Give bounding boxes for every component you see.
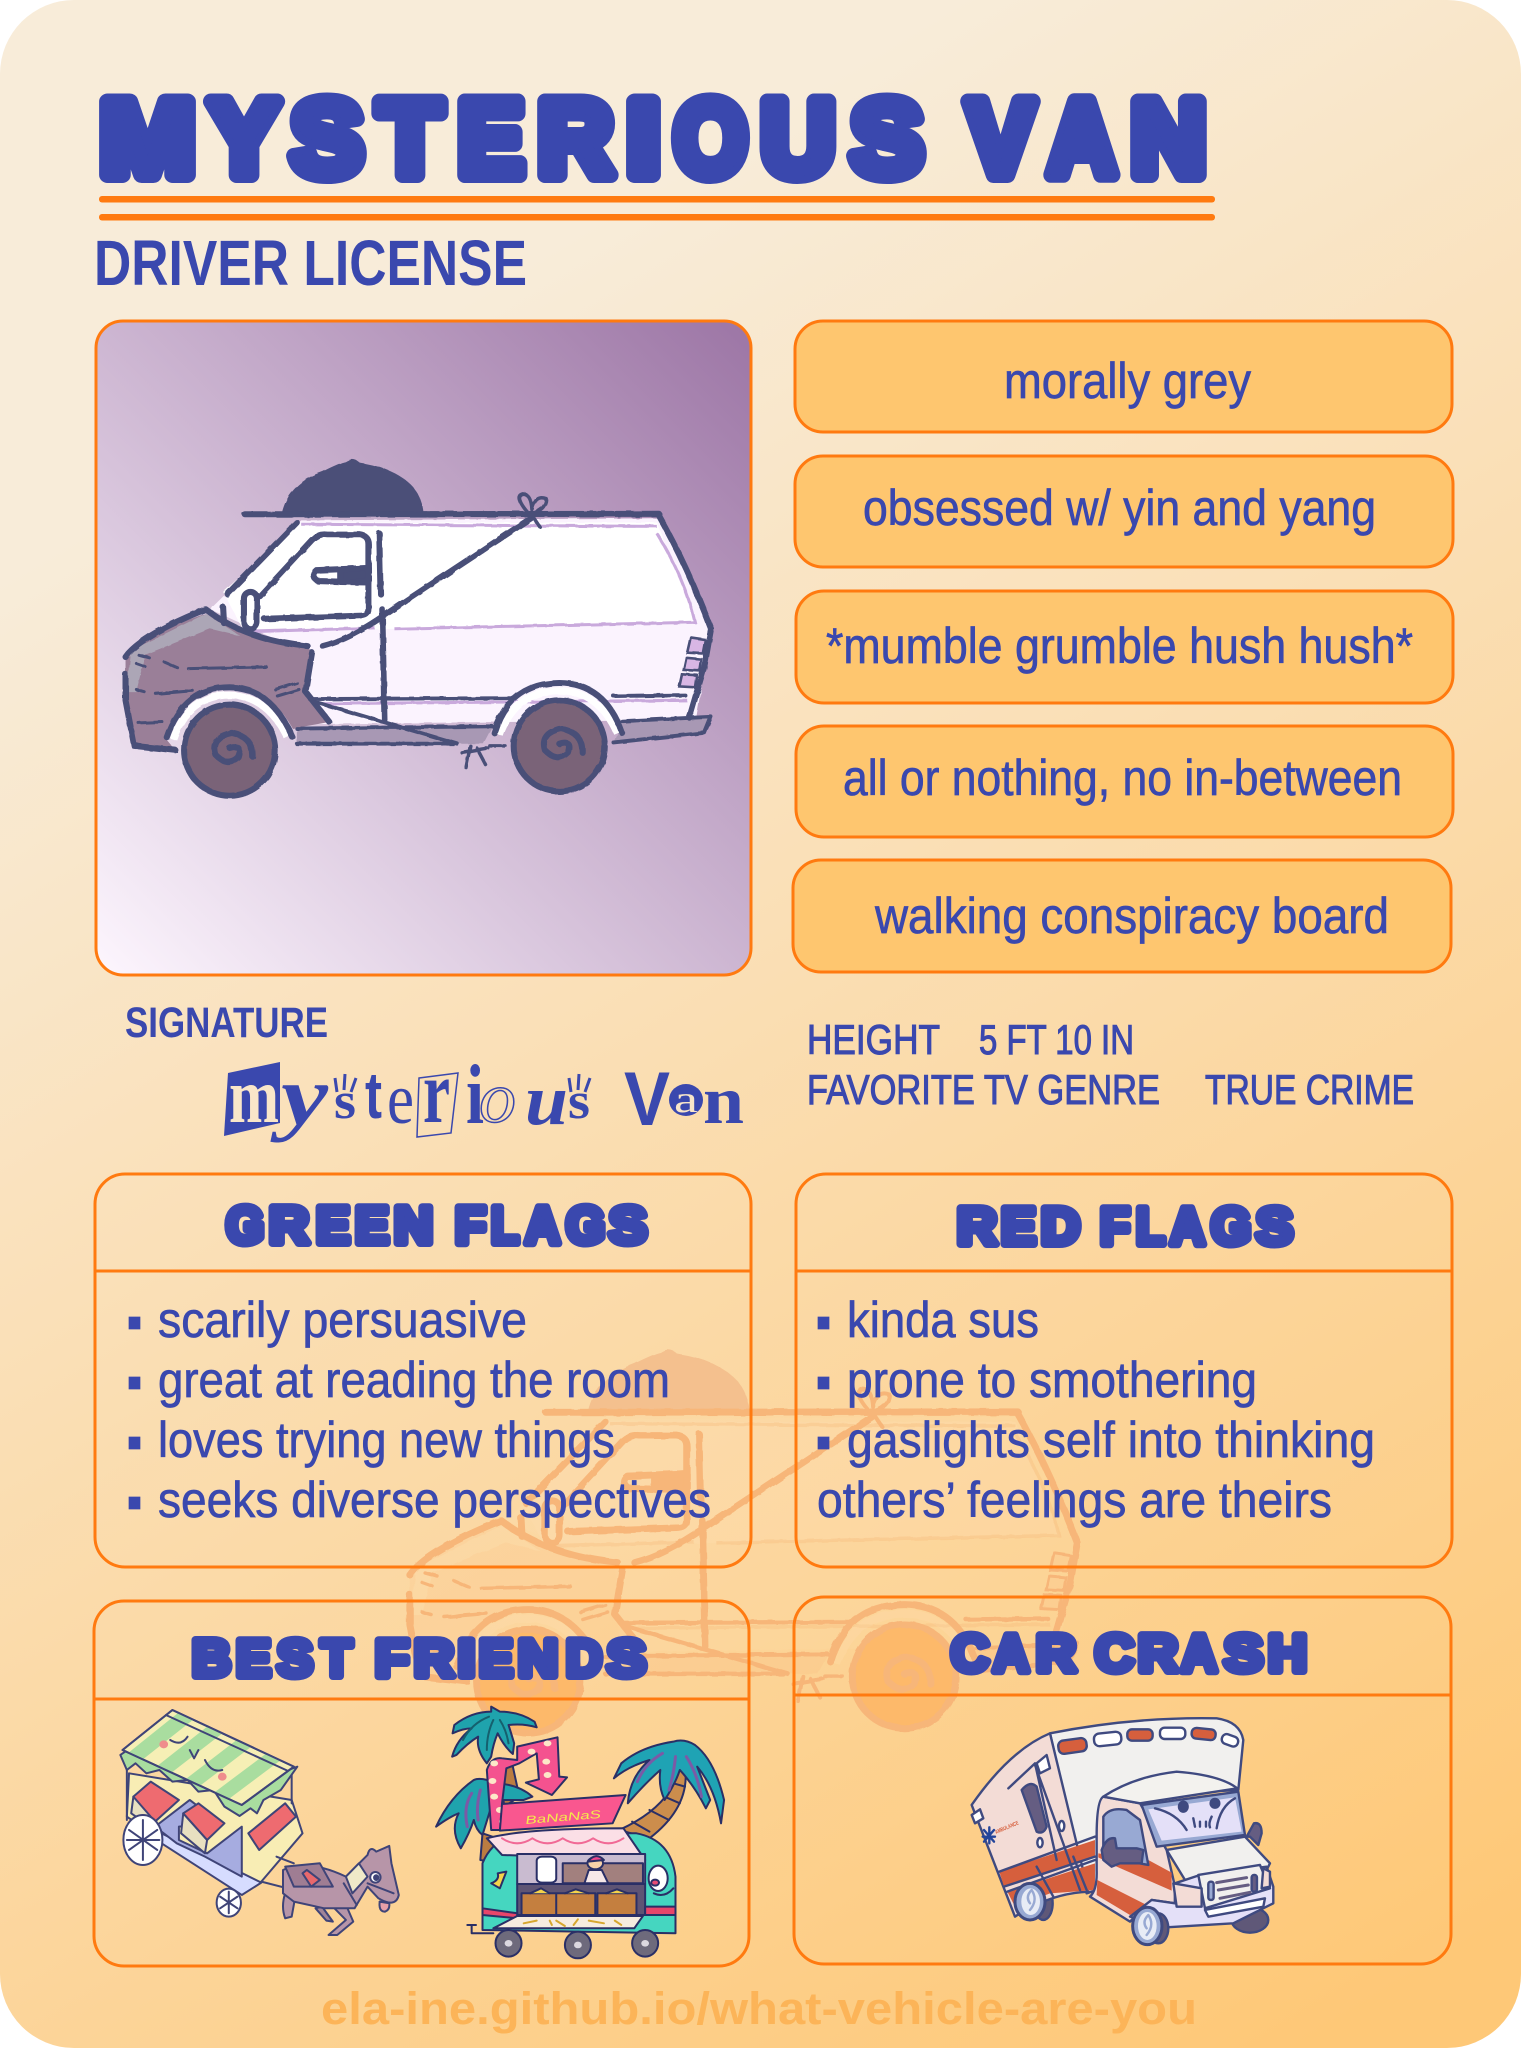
panel: best friends	[94, 1601, 749, 1966]
list: green flags: loves trying new things	[158, 1412, 615, 1468]
heading: car crash: C	[1095, 1625, 1134, 1683]
title: O	[674, 78, 747, 198]
heading: best friends: B	[192, 1630, 231, 1688]
signature: ransom note lettering: t	[365, 1058, 382, 1132]
watermark: faded van	[410, 1350, 1077, 1733]
signature: ransom note lettering: V	[624, 1057, 670, 1142]
heading: green flags: E	[355, 1197, 389, 1255]
signature: ransom note lettering: y	[270, 1049, 328, 1143]
pill: morally grey: morally grey	[1004, 353, 1251, 409]
title: S	[291, 78, 363, 198]
heading: green flags: E	[316, 1197, 350, 1255]
stats: height and favorite genre: TRUE CRIME	[1205, 1066, 1414, 1113]
pill: yin and yang	[795, 456, 1453, 567]
icon: van illustration	[126, 459, 711, 796]
signature: ransom note lettering	[224, 1043, 744, 1143]
heading: red flags: E	[1001, 1198, 1036, 1256]
heading: green flags: F	[455, 1197, 486, 1255]
heading: red flags: F	[1100, 1198, 1130, 1256]
title: E	[458, 78, 524, 198]
stats: height and favorite genre: 5 FT 10 IN	[979, 1016, 1134, 1063]
heading: car crash: H	[1268, 1625, 1307, 1683]
heading: red flags: G	[1211, 1198, 1251, 1256]
signature: ransom note lettering: r	[423, 1043, 450, 1142]
subtitle: DRIVER LICENSE	[94, 227, 527, 299]
list: green flags: seeks diverse perspectives	[158, 1472, 711, 1528]
heading: red flags: D	[1041, 1198, 1080, 1256]
heading: best friends: T	[321, 1630, 352, 1688]
icon: horse-drawn calesa	[120, 1710, 399, 1935]
pill: all or nothing	[796, 726, 1453, 837]
heading: red flags: L	[1136, 1198, 1165, 1256]
signature: ransom note lettering: m	[229, 1052, 279, 1139]
heading: green flags: R	[269, 1197, 309, 1255]
heading: green flags: A	[525, 1197, 560, 1255]
heading: best friends: E	[236, 1630, 271, 1688]
footer url: ela-ine.github.io/what-vehicle-are-you	[321, 1983, 1197, 2034]
signature: ransom note lettering: e	[387, 1059, 414, 1139]
stats: height and favorite genre: HEIGHT	[807, 1016, 940, 1063]
title: M	[100, 78, 195, 198]
title: U	[761, 78, 835, 198]
pill: conspiracy board: walking conspiracy board	[874, 888, 1389, 944]
heading: car crash: C	[951, 1625, 989, 1683]
stats: height and favorite genre: FAVORITE TV GENRE	[807, 1066, 1160, 1113]
title double underline	[99, 196, 1215, 220]
panel: car crash	[794, 1597, 1451, 1964]
pill: morally grey	[795, 321, 1452, 432]
signature: ransom note lettering: i	[466, 1048, 484, 1142]
pill: conspiracy board	[793, 860, 1451, 972]
list: red flags: gaslights self into thinking	[847, 1412, 1375, 1468]
heading: best friends: D	[566, 1630, 602, 1688]
signature: ransom note lettering: o	[479, 1058, 516, 1138]
title: V	[967, 78, 1034, 198]
signature label: SIGNATURE	[125, 999, 328, 1047]
panel: red flags	[796, 1174, 1452, 1567]
heading: best friends: I	[458, 1630, 475, 1688]
signature: ransom note lettering: u	[525, 1060, 568, 1140]
pill: all or nothing: all or nothing, no in-between	[843, 750, 1402, 806]
heading: green flags: N	[394, 1197, 433, 1255]
heading: green flags: G	[566, 1197, 605, 1255]
list: red flags: others’ feelings are theirs	[817, 1472, 1332, 1528]
icon: ambulance: AMBULANCE	[994, 1820, 1020, 1836]
list: green flags: great at reading the room	[158, 1352, 670, 1408]
list: red flags: prone to smothering	[847, 1352, 1257, 1408]
panel: portrait with van	[96, 321, 751, 975]
heading: car crash: S	[1224, 1625, 1263, 1683]
heading: best friends: F	[375, 1630, 409, 1688]
list: red flags	[817, 1292, 1375, 1528]
pill: mumble grumble	[796, 591, 1453, 703]
icon: banana food truck: BaNaNaS	[524, 1808, 602, 1827]
title: N	[1131, 78, 1206, 198]
list: red flags: kinda sus	[847, 1292, 1039, 1348]
pill: mumble grumble: *mumble grumble hush hush*	[826, 618, 1413, 674]
list: green flags	[129, 1292, 711, 1528]
heading: green flags: G	[226, 1197, 264, 1255]
heading: best friends: E	[479, 1630, 513, 1688]
signature: ransom note lettering: a	[674, 1079, 698, 1121]
panel: trait pills	[793, 321, 1453, 972]
heading: car crash: A	[1181, 1625, 1217, 1683]
heading: red flags: R	[957, 1198, 997, 1256]
panel: green flags	[95, 1174, 751, 1567]
heading: green flags: S	[609, 1197, 647, 1255]
list: green flags: scarily persuasive	[158, 1292, 527, 1348]
heading: car crash: R	[1138, 1625, 1178, 1683]
heading: red flags: S	[1256, 1198, 1293, 1256]
heading: best friends: N	[518, 1630, 558, 1688]
signature: ransom note lettering: n	[703, 1062, 744, 1138]
title: Y	[209, 78, 279, 198]
icon: banana food truck	[436, 1707, 724, 1958]
heading: green flags: L	[491, 1197, 519, 1255]
pill: yin and yang: obsessed w/ yin and yang	[863, 480, 1376, 536]
stats: height and favorite genre	[807, 1016, 1414, 1113]
title: I	[627, 78, 660, 198]
title: A	[1048, 78, 1116, 198]
signature: ransom note lettering: s	[568, 1073, 590, 1130]
title: S	[851, 78, 923, 198]
heading: car crash: R	[1036, 1625, 1076, 1683]
icon: ambulance	[972, 1718, 1273, 1945]
title: T	[378, 78, 442, 198]
heading: best friends: S	[277, 1630, 313, 1688]
heading: best friends: R	[414, 1630, 454, 1688]
heading: red flags: A	[1170, 1198, 1205, 1256]
signature: ransom note lettering: s	[334, 1073, 356, 1130]
title: R	[538, 78, 613, 198]
heading: best friends: S	[607, 1630, 646, 1688]
heading: car crash: A	[993, 1625, 1029, 1683]
